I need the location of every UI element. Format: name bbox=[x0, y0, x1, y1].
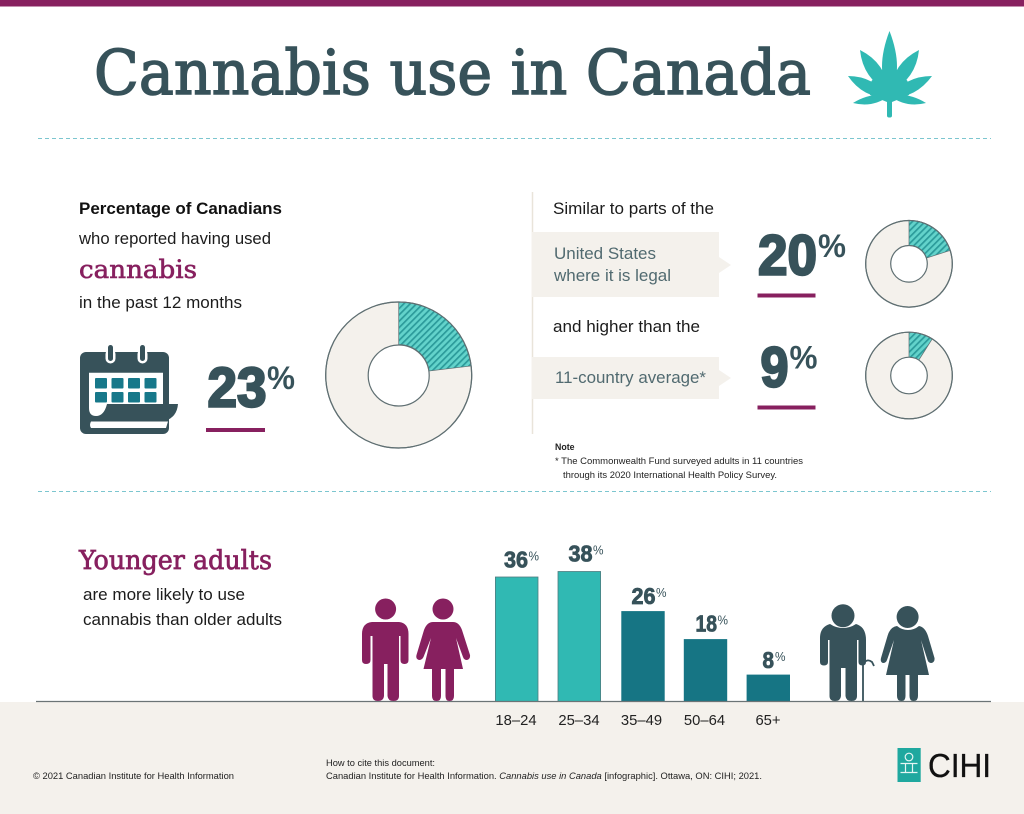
top banner bbox=[0, 0, 1024, 6]
icon: older man with cane bbox=[820, 604, 874, 701]
statistic: 23%: % bbox=[267, 360, 295, 396]
value labels: 8 bbox=[762, 647, 774, 673]
value labels: % bbox=[593, 542, 604, 558]
icon: older woman bbox=[881, 606, 935, 701]
note: * The Commonwealth Fund surveyed adults in 11 countries bbox=[555, 456, 804, 466]
donut chart: 23% bbox=[326, 302, 472, 448]
value labels: 26 bbox=[632, 583, 656, 609]
statistic: 9%: 9 bbox=[760, 336, 788, 400]
citation: Canadian Institute for Health Information. Cannabis use in Canada [infographic]. Ottawa, ON: CIHI; 2021. bbox=[326, 771, 762, 781]
donut chart: 9% bbox=[866, 332, 952, 419]
panel: percentage of Canadians bbox=[78, 199, 472, 448]
statistic: 20%: % bbox=[818, 228, 846, 264]
statistic: 9% bbox=[758, 336, 818, 410]
value labels: % bbox=[718, 612, 728, 628]
intro text: who reported having used bbox=[78, 229, 271, 248]
note bbox=[555, 442, 804, 480]
text: similar to parts of the: Similar to parts of the bbox=[553, 199, 714, 218]
citation bbox=[326, 758, 762, 781]
donut chart: 20% bbox=[866, 220, 952, 307]
intro text: in the past 12 months bbox=[79, 293, 242, 312]
axis line bbox=[36, 700, 991, 702]
axis labels: 50–64 bbox=[684, 713, 725, 729]
note: Note bbox=[555, 442, 575, 452]
icon: cannabis leaf bbox=[848, 31, 932, 118]
axis labels: 25–34 bbox=[558, 713, 600, 729]
axis labels bbox=[495, 713, 781, 729]
heading: younger adults bbox=[78, 546, 282, 629]
statistic: 23%: 23 bbox=[208, 356, 266, 418]
value labels: 36 bbox=[504, 546, 528, 572]
logo: CIHI: CIHI bbox=[928, 747, 991, 784]
icon: calendar bbox=[80, 345, 178, 434]
bars bbox=[495, 572, 790, 702]
note: through its 2020 International Health Policy Survey. bbox=[563, 470, 777, 480]
callout: 11-country average: 11-country average* bbox=[555, 368, 706, 387]
logo: CIHI bbox=[898, 747, 991, 784]
statistic: 23% bbox=[206, 356, 295, 432]
copyright: © 2021 Canadian Institute for Health Information bbox=[33, 770, 234, 781]
statistic: 20% bbox=[758, 224, 846, 298]
icon: young man bbox=[362, 598, 408, 701]
value labels: % bbox=[656, 585, 667, 600]
title: Cannabis use in Canada bbox=[94, 36, 811, 109]
icon: young woman bbox=[416, 598, 470, 701]
text: and higher than the: and higher than the bbox=[553, 317, 700, 336]
axis labels: 18–24 bbox=[495, 713, 537, 729]
heading: younger adults: cannabis than older adults bbox=[83, 610, 282, 629]
intro text: Percentage of Canadians bbox=[79, 199, 282, 218]
statistic: 20%: 20 bbox=[758, 224, 817, 288]
citation: How to cite this document: bbox=[326, 758, 435, 768]
bar chart: age groups bbox=[495, 540, 790, 729]
axis labels: 65+ bbox=[755, 713, 781, 729]
callout: United States: United States bbox=[554, 244, 656, 263]
value labels: % bbox=[775, 649, 786, 664]
axis labels: 35–49 bbox=[621, 713, 662, 729]
value labels bbox=[504, 540, 786, 673]
value labels: % bbox=[528, 548, 539, 564]
footer band bbox=[0, 702, 1024, 814]
callout: United States bbox=[532, 232, 731, 297]
callout: United States: where it is legal bbox=[553, 266, 671, 285]
intro text bbox=[78, 199, 282, 312]
panel: comparisons bbox=[532, 199, 952, 480]
heading: younger adults: are more likely to use bbox=[83, 585, 245, 604]
value labels: 38 bbox=[568, 540, 593, 566]
callout: 11-country average bbox=[532, 357, 731, 399]
statistic: 9%: % bbox=[790, 340, 818, 376]
intro text: cannabis bbox=[79, 255, 197, 284]
value labels: 18 bbox=[696, 610, 717, 636]
heading: younger adults: Younger adults bbox=[78, 546, 272, 576]
